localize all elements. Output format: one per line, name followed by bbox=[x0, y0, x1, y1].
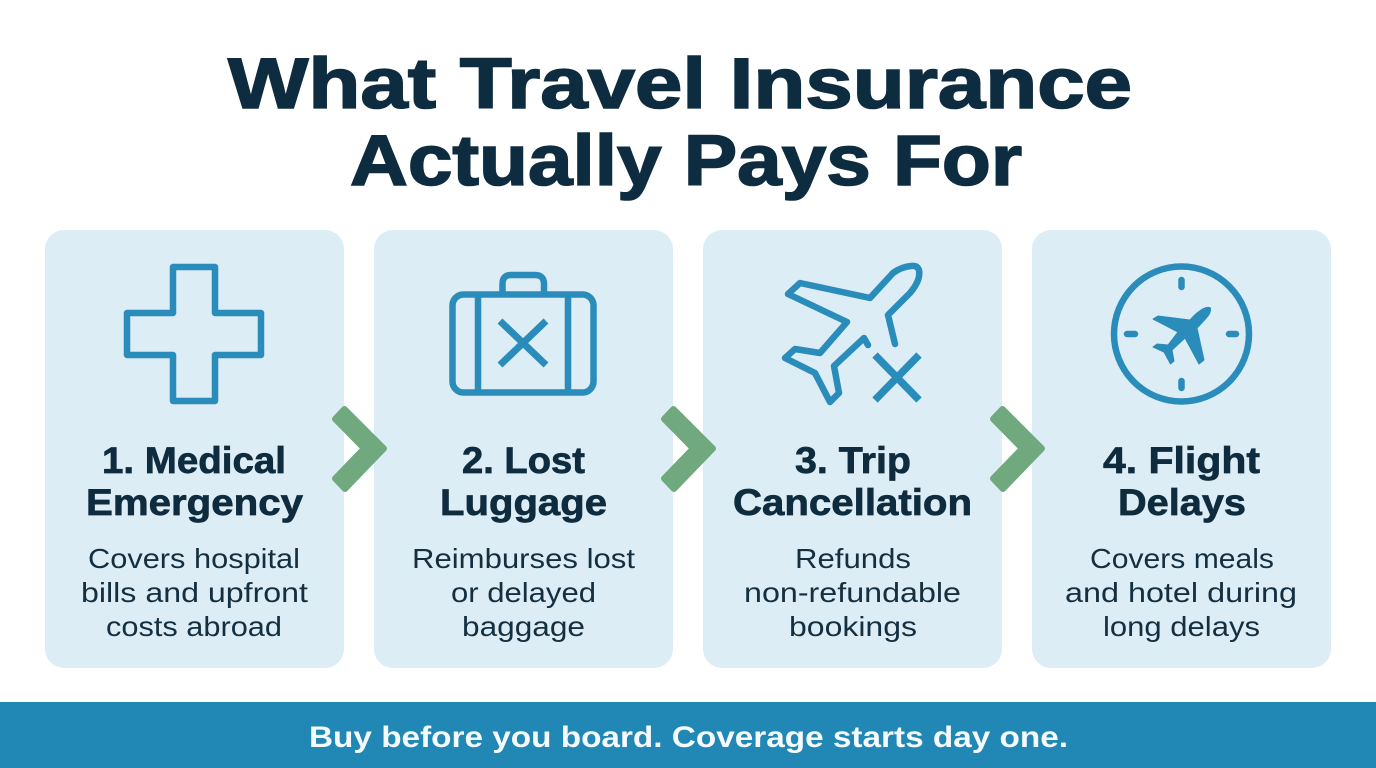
icon: airplane with x bbox=[785, 266, 919, 402]
text: cancellation description bbox=[744, 543, 961, 642]
arrow: step 3 to 4 bbox=[993, 409, 1042, 489]
title: What Travel Insurance bbox=[228, 45, 1132, 124]
heading: medical emergency bbox=[86, 440, 303, 523]
panel: flight delays bbox=[1032, 230, 1331, 668]
panel: lost luggage bbox=[374, 230, 673, 668]
heading: lost luggage bbox=[440, 440, 607, 523]
footer banner: Buy before you board. Coverage starts day one. bbox=[309, 721, 1068, 754]
heading: flight delays bbox=[1103, 440, 1260, 523]
heading: trip cancellation: Cancellation bbox=[733, 482, 972, 523]
arrow: step 1 to 2 bbox=[335, 409, 384, 489]
text: medical description: Covers hospital bbox=[88, 543, 300, 574]
arrow: step 2 to 3 bbox=[664, 409, 713, 489]
text: cancellation description: non-refundable bbox=[744, 577, 961, 608]
icon: clock with airplane bbox=[1114, 266, 1249, 402]
text: luggage description: baggage bbox=[462, 611, 585, 642]
title bbox=[228, 45, 1132, 201]
heading: flight delays: 4. Flight bbox=[1103, 440, 1260, 481]
heading: trip cancellation: 3. Trip bbox=[795, 440, 911, 481]
text: cancellation description: bookings bbox=[789, 611, 917, 642]
title: Actually Pays For bbox=[350, 122, 1022, 201]
text: delays description: long delays bbox=[1103, 611, 1260, 642]
heading: lost luggage: 2. Lost bbox=[462, 440, 585, 481]
panel: medical emergency bbox=[45, 230, 344, 668]
icon: suitcase with x bbox=[452, 275, 594, 392]
text: medical description bbox=[81, 543, 308, 642]
heading: flight delays: Delays bbox=[1118, 482, 1246, 523]
text: luggage description bbox=[412, 543, 635, 642]
text: luggage description: Reimburses lost bbox=[412, 543, 635, 574]
text: delays description: and hotel during bbox=[1065, 577, 1297, 608]
text: luggage description: or delayed bbox=[451, 577, 596, 608]
text: medical description: bills and upfront bbox=[81, 577, 308, 608]
heading: medical emergency: Emergency bbox=[86, 482, 303, 523]
text: delays description bbox=[1065, 543, 1297, 642]
text: cancellation description: Refunds bbox=[795, 543, 911, 574]
heading: lost luggage: Luggage bbox=[440, 482, 607, 523]
text: medical description: costs abroad bbox=[106, 611, 282, 642]
text: delays description: Covers meals bbox=[1090, 543, 1274, 574]
heading: trip cancellation bbox=[733, 440, 972, 523]
footer banner bbox=[0, 702, 1376, 768]
heading: medical emergency: 1. Medical bbox=[102, 440, 286, 481]
icon: medical cross bbox=[127, 267, 261, 401]
panel: trip cancellation bbox=[703, 230, 1002, 668]
